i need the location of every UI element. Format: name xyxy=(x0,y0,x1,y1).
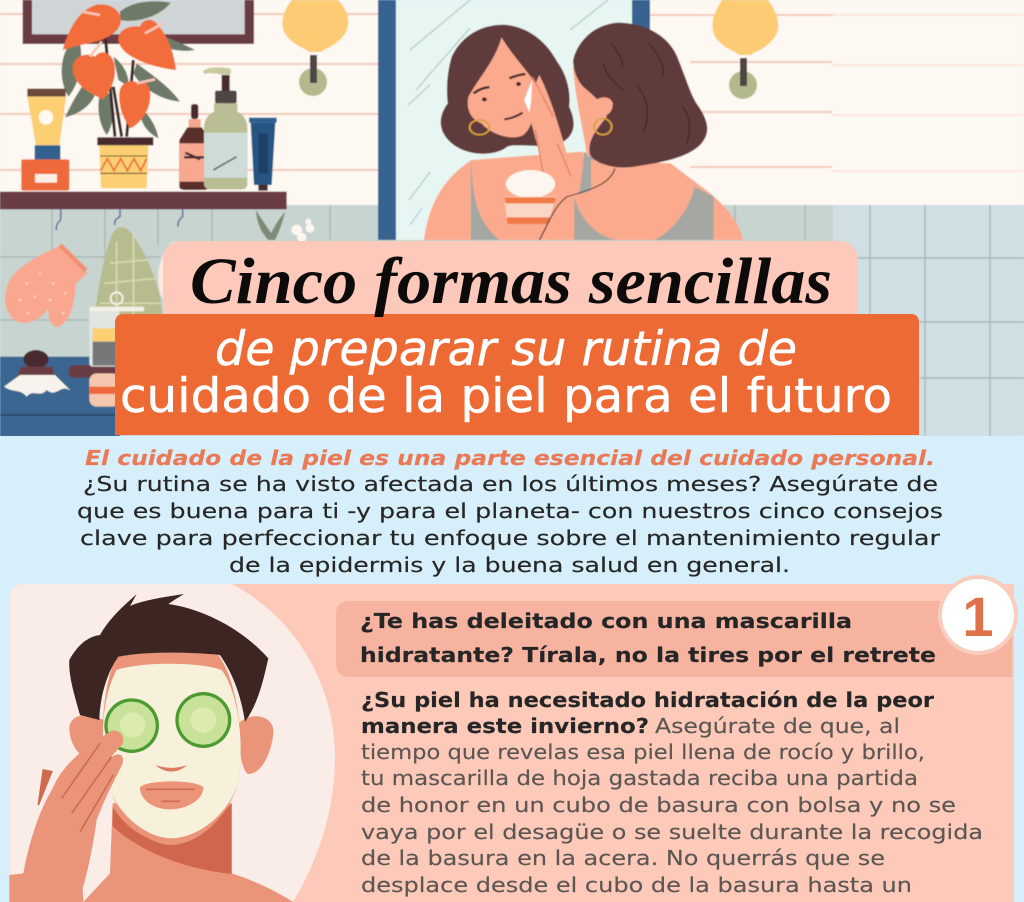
body text xyxy=(361,688,983,897)
glass jar xyxy=(68,292,144,378)
neck and shoulders xyxy=(83,803,293,902)
dropper bottle xyxy=(179,104,209,190)
woman in mirror xyxy=(424,23,743,240)
ear left xyxy=(69,715,103,767)
illustration backdrop xyxy=(10,584,335,902)
ear and earring xyxy=(594,97,613,135)
reflected body xyxy=(424,152,607,240)
tiles right xyxy=(833,205,1024,436)
heading text xyxy=(360,609,936,667)
intro line 3: clave para perfeccionar tu enfoque sobre el mantenimiento regular xyxy=(80,526,941,550)
body line 6: vaya por el desagüe o se suelte durante la recogida xyxy=(361,820,983,844)
tile grid xyxy=(0,205,1024,436)
cream jar xyxy=(504,170,556,224)
cream pot xyxy=(89,373,119,407)
illustration: bathroom scene xyxy=(0,0,1024,437)
mirror glass xyxy=(396,0,632,240)
title: script line: Cinco formas sencillas xyxy=(190,245,832,318)
subtitle line 1: de preparar su rutina de xyxy=(215,322,797,377)
mirror frame xyxy=(378,0,396,240)
body line 8: desplace desde el cubo de la basura hasta un xyxy=(361,873,912,897)
cucumber left xyxy=(104,698,159,753)
title background: pink xyxy=(163,241,858,351)
plant pot xyxy=(97,137,153,188)
plant behind title xyxy=(256,210,314,242)
forehead skin and chin xyxy=(103,652,241,845)
nose xyxy=(155,765,187,772)
body line 7: de la basura en la acera. No querrás que se xyxy=(361,846,885,870)
oven mitt xyxy=(5,245,87,327)
illustration: man with face mask xyxy=(9,594,293,902)
tiles left xyxy=(0,205,833,436)
subtitle xyxy=(120,322,892,424)
body line 4: tu mascarilla de hoja gastada reciba una partida xyxy=(361,766,918,790)
intro line 4: de la epidermis y la buena salud en general. xyxy=(229,553,790,577)
cucumber right xyxy=(175,692,231,748)
body line 3: tiempo que revelas esa piel llena de rocío y brillo, xyxy=(361,740,925,764)
hand shadow xyxy=(38,743,113,832)
panel: tip 1 xyxy=(9,575,1018,902)
hair xyxy=(69,594,268,722)
mask xyxy=(103,664,241,838)
hand xyxy=(9,731,123,902)
shelf scene xyxy=(0,0,314,437)
heading line 2: hidratante? Tírala, no la tires por el retrete xyxy=(360,643,936,667)
earphone cable xyxy=(539,168,615,240)
lips xyxy=(140,781,203,809)
body line 2 regular: Asegúrate de que, al xyxy=(655,714,900,738)
raised arm and hand xyxy=(529,75,575,187)
counter xyxy=(0,357,120,437)
number badge xyxy=(938,575,1018,655)
wall stripes xyxy=(0,14,1024,171)
right wall section xyxy=(833,0,1024,205)
back of head hair xyxy=(573,23,707,168)
pink cloth behind title xyxy=(158,242,187,300)
intro text block xyxy=(77,446,943,577)
panel background xyxy=(10,584,1014,902)
body line 5: de honor en un cubo de basura con bolsa y no se xyxy=(361,793,956,817)
intro line 1: ¿Su rutina se ha visto afectada en los últimos meses? Asegúrate de xyxy=(83,472,938,496)
hooks xyxy=(56,209,183,230)
blue tube xyxy=(249,118,277,191)
green towel xyxy=(95,227,162,337)
heading band xyxy=(336,601,1012,677)
mirror frame right xyxy=(632,0,650,30)
finger lines xyxy=(533,77,571,177)
lower background xyxy=(0,436,1024,902)
back of head skin xyxy=(573,67,615,157)
mirror reflections xyxy=(408,0,608,225)
picture frame xyxy=(23,0,254,44)
ear right xyxy=(238,716,273,774)
hair strands xyxy=(603,43,690,143)
reflected hair xyxy=(441,25,574,154)
neck shadow xyxy=(113,803,232,874)
intro headline: El cuidado de la piel es una parte esencial del cuidado personal. xyxy=(85,446,935,470)
reflected face xyxy=(468,37,539,137)
title background: orange xyxy=(115,314,919,435)
pump bottle xyxy=(203,67,247,189)
back of woman body xyxy=(539,160,743,240)
plant xyxy=(62,1,195,138)
number badge: 1 xyxy=(962,585,994,648)
subtitle line 2: cuidado de la piel para el futuro xyxy=(120,369,892,424)
wall lamp right xyxy=(712,0,778,99)
shelf xyxy=(0,192,287,209)
brush xyxy=(4,350,71,397)
body line 2 bold: manera este invierno? xyxy=(361,714,649,738)
intro line 2: que es buena para ti -y para el planeta- con nuestros cinco consejos xyxy=(77,499,943,523)
body line 1: ¿Su piel ha necesitado hidratación de la peor xyxy=(361,688,934,712)
wall lamp left xyxy=(282,0,348,96)
heading line 1: ¿Te has deleitado con una mascarilla xyxy=(360,609,852,633)
cream tube xyxy=(21,89,69,191)
wall xyxy=(0,0,1024,206)
